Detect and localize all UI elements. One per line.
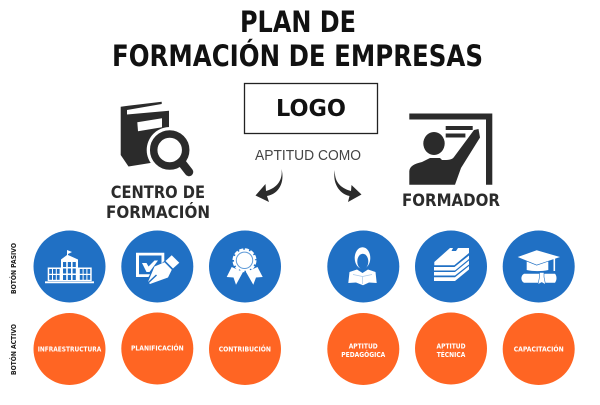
label: botón activo: BOTÓN ACTIVO — [9, 324, 18, 375]
heading: centro de formación: CENTRO DE — [111, 183, 205, 202]
button: contribución icon — [209, 230, 281, 302]
logo box — [244, 84, 378, 134]
button: contribución — [209, 313, 281, 385]
button: aptitud técnica icon — [415, 230, 487, 302]
arrow: right — [334, 170, 362, 202]
arrow: left — [256, 169, 282, 202]
logo box: LOGO — [276, 96, 346, 122]
heading: centro de formación: FORMACIÓN — [106, 203, 210, 222]
title: PLAN DE — [240, 5, 356, 39]
button: planificación — [121, 312, 193, 384]
button: planificación: PLANIFICACIÓN — [131, 344, 184, 352]
button: planificación icon — [121, 230, 193, 302]
button: capacitación icon — [503, 230, 575, 302]
title — [112, 5, 483, 73]
heading: centro de formación — [106, 183, 210, 222]
button: aptitud pedagógica: APTITUD — [349, 342, 378, 350]
button: capacitación — [503, 313, 575, 385]
button: infraestructura icon — [34, 230, 106, 302]
subtitle: aptitud como: APTITUD COMO — [255, 148, 361, 164]
label: botón pasivo: BOTÓN PASIVO — [9, 243, 18, 294]
button: aptitud pedagógica — [327, 313, 399, 385]
button: aptitud técnica: APTITUD — [436, 342, 466, 350]
button: contribución: CONTRIBUCIÓN — [219, 344, 271, 354]
button: infraestructura — [34, 313, 106, 385]
icon: teacher at board — [409, 114, 492, 185]
button: aptitud pedagógica icon — [327, 230, 399, 302]
button: aptitud técnica — [415, 312, 487, 384]
button: infraestructura: INFRAESTRUCTURA — [38, 346, 102, 354]
icon: book with magnifier — [121, 102, 193, 173]
button: aptitud técnica: TÉCNICA — [437, 350, 466, 359]
heading: formador: FORMADOR — [402, 191, 500, 210]
button: aptitud pedagógica: PEDAGÓGICA — [341, 350, 386, 359]
title: FORMACIÓN DE EMPRESAS — [112, 39, 483, 73]
button: capacitación: CAPACITACIÓN — [514, 344, 564, 354]
